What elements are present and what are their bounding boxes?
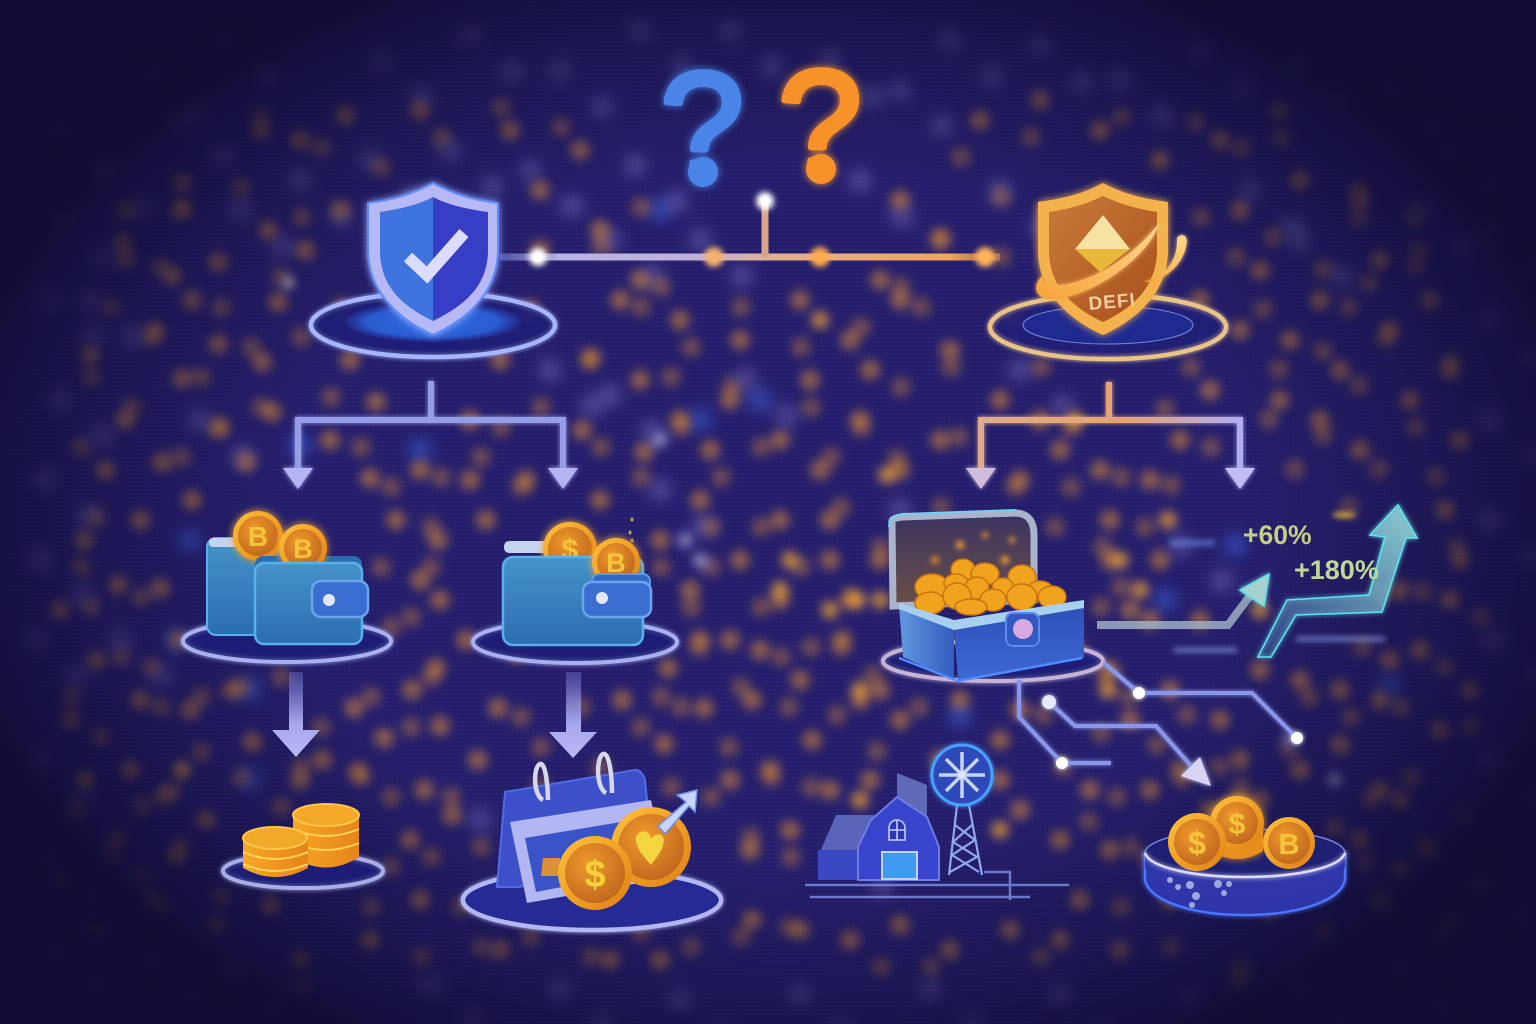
down arrow: wallet one to coin stack bbox=[272, 672, 320, 757]
coin: dollar bbox=[558, 836, 632, 910]
coin stacks bbox=[223, 804, 383, 888]
bitcoin coin right: B bbox=[1279, 829, 1299, 861]
growth arrow: plus 60 percent bbox=[1097, 574, 1269, 625]
coin: bitcoin front: B bbox=[293, 534, 313, 564]
dollar coin left bbox=[1168, 813, 1226, 871]
bitcoin coin right bbox=[1263, 817, 1315, 869]
question mark: orange: ? bbox=[778, 39, 862, 207]
question mark: blue: ? bbox=[660, 41, 744, 209]
coin: dollar: $ bbox=[584, 854, 606, 896]
circuit lines from chest to bowl bbox=[1019, 663, 1303, 786]
label: plus 180 percent: +180% bbox=[1294, 555, 1379, 585]
stacked dollar coin: $ bbox=[1229, 808, 1246, 841]
left branch connector with arrows bbox=[283, 381, 578, 489]
chest coin pile bbox=[915, 559, 1066, 615]
wallet one with bitcoin coins bbox=[183, 511, 391, 662]
coin: bitcoin front bbox=[279, 524, 327, 572]
coin: dollar: $ bbox=[562, 534, 579, 567]
down arrow: wallet two to calendar bbox=[549, 672, 597, 758]
coin: bitcoin back bbox=[233, 511, 283, 561]
icon: growth arrow bbox=[658, 790, 697, 834]
dollar coin left: $ bbox=[1188, 825, 1206, 861]
coin: heart bbox=[611, 807, 691, 887]
calendar with coins and growth arrow bbox=[463, 754, 721, 930]
barn ground line bbox=[805, 872, 1069, 900]
blue shield with checkmark bbox=[311, 183, 555, 357]
top connector line between shields bbox=[500, 192, 1000, 267]
coin: bitcoin back: B bbox=[248, 521, 268, 552]
windmill bbox=[932, 745, 992, 875]
coin: bitcoin: B bbox=[606, 548, 626, 578]
decorative glow streaks near growth arrows bbox=[1170, 512, 1385, 650]
orange DeFi shield bbox=[990, 183, 1226, 359]
bowl with coins bbox=[1145, 796, 1345, 915]
wallet two with coins bbox=[473, 519, 677, 663]
coin: bitcoin bbox=[592, 538, 640, 586]
treasure chest with coins bbox=[883, 510, 1103, 681]
label: plus 60 percent: +60% bbox=[1243, 520, 1312, 550]
stacked dollar coin bbox=[1210, 796, 1264, 859]
barn bbox=[818, 773, 939, 880]
coin: dollar bbox=[543, 522, 597, 576]
growth arrow: plus 180 percent bbox=[1258, 505, 1417, 657]
orange DeFi shield: DEFI bbox=[1088, 290, 1137, 315]
right branch connector with arrows bbox=[966, 382, 1255, 489]
